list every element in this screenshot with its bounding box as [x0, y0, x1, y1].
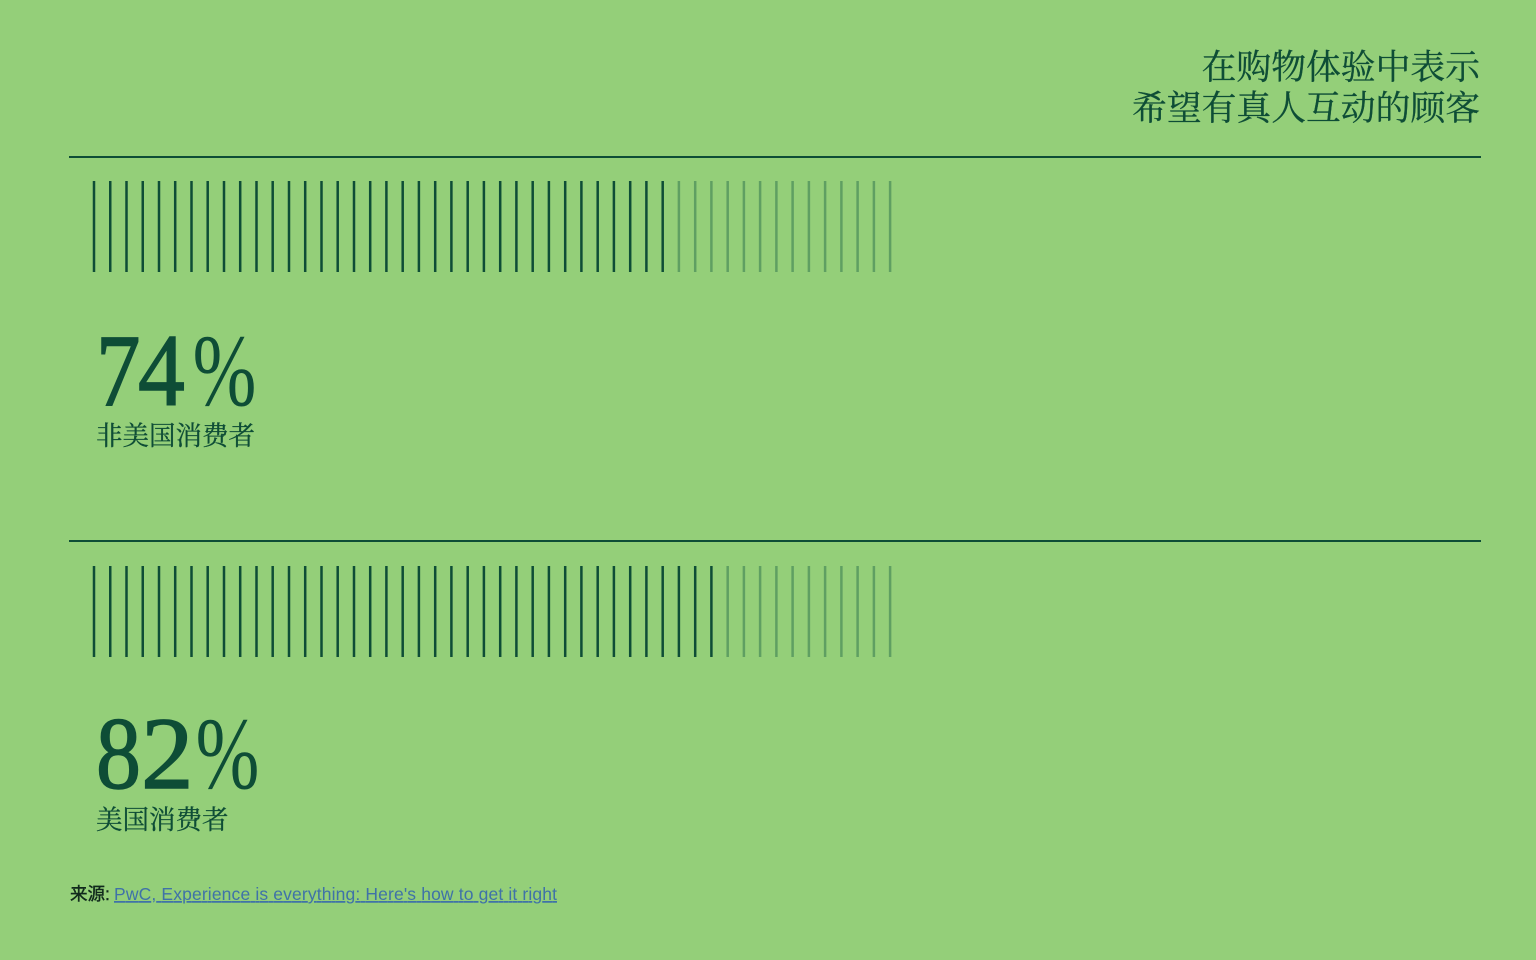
stat: 74% — [96, 313, 256, 428]
title — [1132, 48, 1481, 128]
stat: 82%: 2 — [141, 696, 194, 811]
label: 美国消费者: 美国消费者 — [96, 805, 228, 835]
source: PwC, Experience is everything: Here's how to get it right — [114, 884, 557, 904]
stat: 74%: 7 — [96, 313, 140, 427]
stat: 82%: % — [196, 696, 259, 811]
panel: non-US consumers — [94, 181, 890, 451]
title: 在购物体验中表示 — [1202, 48, 1481, 87]
source: 来源: — [70, 884, 110, 904]
stat: 74%: 4 — [138, 314, 185, 428]
panel: US consumers — [94, 566, 890, 835]
bar chart: 82% — [94, 566, 890, 657]
stat: 82%: 8 — [96, 696, 141, 810]
stat: 82% — [96, 696, 259, 811]
stat: 74%: % — [193, 313, 256, 428]
bar chart: 74% — [94, 181, 890, 272]
label: 非美国消费者: 非美国消费者 — [96, 421, 255, 451]
title: 希望有真人互动的顾客 — [1132, 89, 1480, 128]
